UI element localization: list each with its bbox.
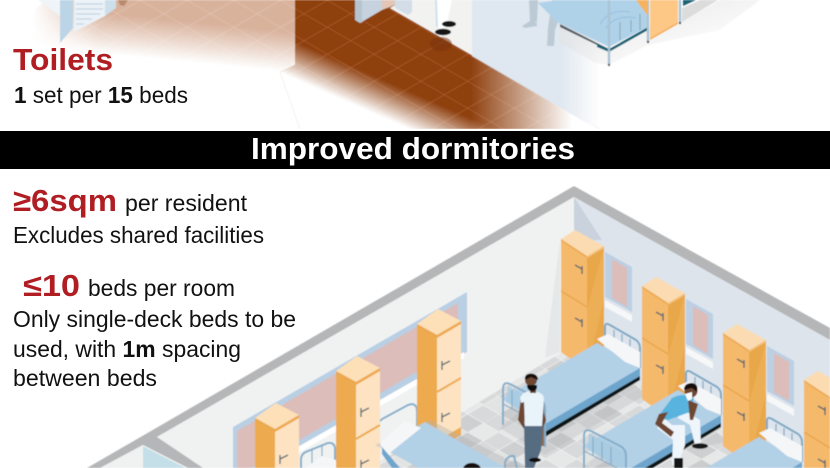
locker: right row 4: [804, 371, 830, 468]
locker: right row 1: [561, 230, 604, 371]
corridor floor and wall stub: [390, 0, 472, 55]
title band: Improved dormitories: [0, 131, 830, 169]
illustration: shared toilets and old dormitory: [30, 0, 760, 129]
person head at bottom edge: [463, 463, 481, 468]
text: beds per room: ≤10: [23, 268, 80, 303]
partition wall stub: [355, 0, 408, 23]
illustration: improved dormitory room: [87, 186, 830, 468]
locker: left row 2: [336, 356, 380, 468]
wall: faded blue dormitory wall: [472, 0, 620, 125]
left wall: [157, 197, 574, 468]
person seated with white mask: [655, 383, 708, 468]
bed: right row 2: [581, 371, 726, 468]
heading: Toilets: Toilets: [13, 42, 113, 77]
floor: dark toilet tiles: [280, 0, 600, 129]
right wall: [574, 197, 830, 468]
title band: Improved dormitories: Improved dormitories: [251, 131, 575, 166]
seated person, faded: [522, 0, 566, 46]
bed: faded bunk bed: [538, 0, 760, 66]
person standing with black mask: [518, 374, 546, 468]
floor: light toilet tiles: [30, 0, 295, 85]
locker: right row 3: [723, 324, 766, 465]
bed: right row 3: [706, 418, 802, 468]
windows on right wall: [605, 252, 794, 416]
bed: right row 1: [500, 324, 645, 455]
floor: [369, 345, 792, 468]
locker: left row 1: [255, 403, 299, 468]
text: space per resident: [13, 183, 264, 248]
room outer wall top: [87, 186, 830, 468]
text: space per resident: ≥6sqm: [13, 183, 117, 218]
legs: person in white trousers: [430, 0, 456, 51]
text: beds per room: beds per room: [88, 275, 235, 301]
text: space per resident: Excludes shared facilities: [13, 222, 264, 248]
illustration: toilet cubicles: [38, 0, 128, 43]
long window on left wall: [233, 292, 467, 468]
text: beds per room: [13, 268, 296, 391]
text: beds per room: used, with 1m spacing: [13, 336, 241, 362]
locker: right row 2: [642, 277, 685, 418]
adjoining room: [100, 445, 186, 468]
bed frame, left row: [377, 404, 417, 440]
bed frame and pillow, far left: [301, 443, 338, 468]
locker: left row 3: [417, 309, 461, 449]
text: toilet ratio: 1 set per 15 beds: [14, 82, 188, 108]
text: beds per room: Only single-deck beds to be: [13, 306, 296, 332]
corner shadow: [574, 197, 602, 240]
text: beds per room: between beds: [13, 365, 157, 391]
text: space per resident: per resident: [125, 190, 248, 216]
bed: left row: [375, 420, 525, 468]
